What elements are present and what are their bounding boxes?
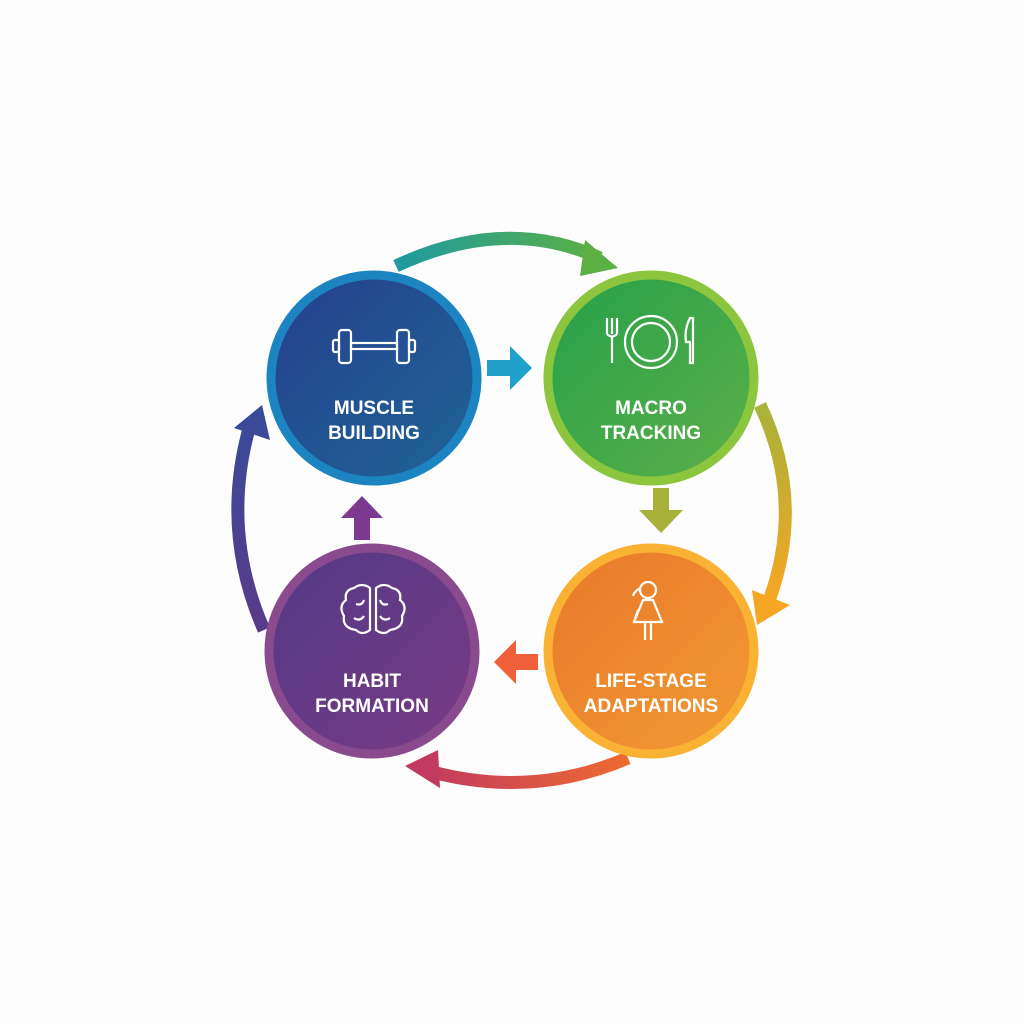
arrow: left arc xyxy=(234,405,270,630)
circle: life-stage adaptations xyxy=(548,548,754,754)
circle: macro tracking: MACRO xyxy=(615,398,687,419)
icon: plate and cutlery xyxy=(607,316,693,368)
arrow: top arc xyxy=(396,238,618,276)
arrow: purple up xyxy=(341,496,383,540)
circle: muscle building: MUSCLE xyxy=(334,398,414,419)
arrow: bottom arc xyxy=(405,750,628,788)
icon: brain xyxy=(341,585,405,633)
icon: girl figure xyxy=(633,582,662,640)
circle: life-stage adaptations: ADAPTATIONS xyxy=(584,696,718,717)
arrow: blue right xyxy=(487,346,532,390)
arrow: green down xyxy=(639,488,683,533)
circle: muscle building: BUILDING xyxy=(328,423,420,444)
circle: habit formation xyxy=(269,548,475,754)
circle: macro tracking: TRACKING xyxy=(601,423,701,444)
circle: habit formation: FORMATION xyxy=(315,696,429,717)
circle: macro tracking xyxy=(548,275,754,481)
circle: muscle building xyxy=(271,275,477,481)
arrow: orange left xyxy=(494,640,538,684)
arrow: right arc xyxy=(752,405,790,625)
circle: life-stage adaptations: LIFE-STAGE xyxy=(595,671,707,692)
icon: dumbbell xyxy=(333,330,415,363)
circle: habit formation: HABIT xyxy=(343,671,401,692)
